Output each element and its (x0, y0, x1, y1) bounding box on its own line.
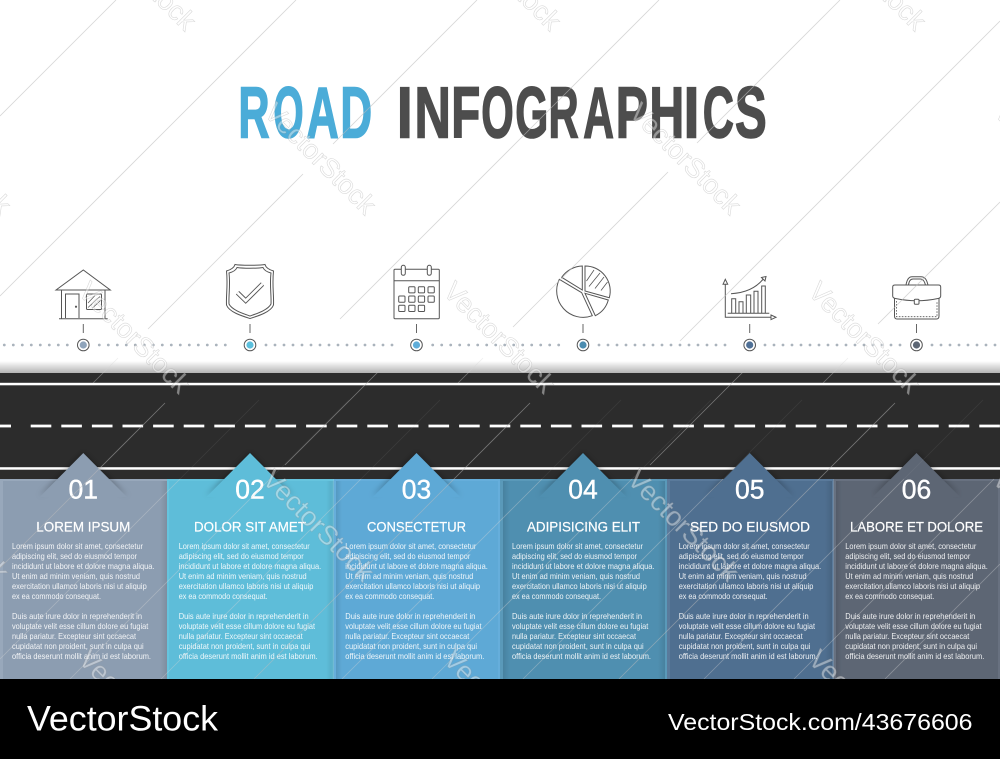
body text: nulla pariatur. Excepteur sint occaecat (179, 631, 303, 641)
timeline markers (78, 324, 922, 351)
body text (12, 541, 154, 661)
panel: 05 sed do eiusmod (667, 452, 834, 679)
number: 02 (235, 474, 265, 504)
watermark: repeated VectorStock text: VectorStock (622, 464, 745, 587)
number: 01 (69, 474, 98, 504)
number: 05 (735, 474, 764, 504)
icon: growth chart (723, 276, 776, 320)
marker 02 (244, 339, 256, 351)
body text: incididunt ut labore et dolore magna aliqua. (679, 561, 821, 571)
watermark: repeated VectorStock text: VectorStock (257, 464, 380, 587)
body text: Lorem ipsum dolor sit amet, consectetur (845, 541, 977, 551)
title: I (397, 72, 413, 153)
title: O (481, 74, 514, 153)
title (238, 72, 767, 154)
body text: nulla pariatur. Excepteur sint occaecat (679, 631, 803, 641)
body text: cupidatat non proident, sunt in culpa qui (12, 641, 144, 651)
body text (345, 541, 488, 661)
body text: exercitation ullamco laboris nisi ut aliquip (179, 581, 314, 591)
number: 06 (902, 474, 931, 504)
body text: officia deserunt mollit anim id est laborum. (845, 651, 984, 661)
body text: nulla pariatur. Excepteur sint occaecat (345, 631, 470, 641)
body text: officia deserunt mollit anim id est laborum. (512, 651, 651, 661)
body text: Lorem ipsum dolor sit amet, consectetur (345, 541, 477, 551)
title: S (735, 73, 767, 153)
body text: adipiscing elit, sed do eiusmod tempor (679, 551, 804, 561)
heading: CONSECTETUR (367, 520, 466, 534)
body text: Duis aute irure dolor in reprehenderit in (179, 611, 309, 621)
body text: ex ea commodo consequat. (679, 591, 768, 601)
body text: officia deserunt mollit anim id est laborum. (679, 651, 818, 661)
body text: voluptate velit esse cillum dolore eu fugiat (512, 621, 649, 631)
body text: incididunt ut labore et dolore magna aliqua. (345, 561, 488, 571)
body text: cupidatat non proident, sunt in culpa qui (345, 641, 477, 651)
body text: Duis aute irure dolor in reprehenderit in (12, 611, 142, 621)
panel: 02 dolor sit amet (167, 452, 334, 679)
road (0, 373, 1000, 479)
body text: incididunt ut labore et dolore magna aliqua. (179, 561, 321, 571)
body text: cupidatat non proident, sunt in culpa qui (179, 641, 311, 651)
title: F (451, 73, 480, 153)
title: G (515, 72, 548, 153)
body text: Lorem ipsum dolor sit amet, consectetur (12, 541, 143, 551)
body text: exercitation ullamco laboris nisi ut aliquip (12, 581, 147, 591)
body text: Ut enim ad minim veniam, quis nostrud (679, 571, 807, 581)
body text: ex ea commodo consequat. (345, 591, 434, 601)
body text: officia deserunt mollit anim id est laborum. (345, 651, 484, 661)
body text: Duis aute irure dolor in reprehenderit in (345, 611, 476, 621)
icon: calendar (394, 265, 439, 319)
marker 04 (577, 339, 589, 351)
footer logo text: VectorStock (27, 700, 219, 738)
body text: Duis aute irure dolor in reprehenderit in (845, 611, 976, 621)
icon: house (56, 270, 110, 319)
marker 06 (911, 339, 922, 351)
body text: exercitation ullamco laboris nisi ut aliquip (845, 581, 980, 591)
heading: LOREM IPSUM (36, 520, 130, 534)
title: R (548, 74, 579, 153)
panel: 01 lorem ipsum (0, 452, 167, 679)
marker 05 (744, 339, 756, 351)
road shadow (0, 361, 1000, 373)
body text: nulla pariatur. Excepteur sint occaecat (12, 631, 137, 641)
marker 03 (411, 339, 422, 351)
number: 03 (402, 474, 431, 504)
body text (512, 541, 654, 661)
panel: 06 labore et dolore (834, 452, 1000, 679)
body text: ex ea commodo consequat. (845, 591, 934, 601)
body text: exercitation ullamco laboris nisi ut aliquip (679, 581, 814, 591)
marker 01 (78, 339, 89, 351)
body text: adipiscing elit, sed do eiusmod tempor (12, 551, 137, 561)
title: N (414, 74, 451, 154)
body text: Ut enim ad minim veniam, quis nostrud (512, 571, 640, 581)
footer image id: VectorStock.com/43676606 (668, 709, 972, 735)
icon: pie chart (557, 266, 610, 317)
body text: exercitation ullamco laboris nisi ut aliquip (512, 581, 647, 591)
body text: adipiscing elit, sed do eiusmod tempor (179, 551, 304, 561)
watermark: repeated VectorStock text: VectorStock (259, 97, 382, 220)
body text: Ut enim ad minim veniam, quis nostrud (12, 571, 140, 581)
title: R (238, 72, 270, 153)
title: O (273, 74, 304, 154)
body text: officia deserunt mollit anim id est laborum. (12, 651, 151, 661)
heading: ADIPISICING ELIT (527, 520, 640, 534)
body text: officia deserunt mollit anim id est laborum. (179, 651, 318, 661)
body text: ex ea commodo consequat. (179, 591, 268, 601)
body text: ex ea commodo consequat. (512, 591, 601, 601)
body text: voluptate velit esse cillum dolore eu fugiat (845, 621, 982, 631)
body text: Lorem ipsum dolor sit amet, consectetur (512, 541, 643, 551)
body text: adipiscing elit, sed do eiusmod tempor (512, 551, 637, 561)
body text: incididunt ut labore et dolore magna aliqua. (12, 561, 154, 571)
title: A (583, 72, 614, 153)
watermark: repeated VectorStock text: VectorStock (624, 97, 747, 220)
icon: briefcase (893, 277, 941, 319)
number: 04 (568, 474, 598, 504)
heading: SED DO EIUSMOD (690, 520, 810, 534)
title: A (306, 73, 339, 153)
body text: Ut enim ad minim veniam, quis nostrud (845, 571, 974, 581)
body text: cupidatat non proident, sunt in culpa qui (512, 641, 644, 651)
body text: voluptate velit esse cillum dolore eu fugiat (679, 621, 816, 631)
heading: LABORE ET DOLORE (850, 520, 983, 534)
body text (845, 541, 988, 661)
body text: Lorem ipsum dolor sit amet, consectetur (679, 541, 810, 551)
body text (679, 541, 821, 661)
footer band (0, 679, 1000, 759)
icon: shield with check (226, 264, 274, 318)
body text: adipiscing elit, sed do eiusmod tempor (345, 551, 471, 561)
watermark: repeated VectorStock text: VectorStock (803, 276, 926, 399)
body text: Lorem ipsum dolor sit amet, consectetur (179, 541, 310, 551)
watermark: repeated VectorStock text: VectorStock (73, 276, 196, 399)
body text: Duis aute irure dolor in reprehenderit in (679, 611, 809, 621)
body text: adipiscing elit, sed do eiusmod tempor (845, 551, 971, 561)
body text: ex ea commodo consequat. (12, 591, 101, 601)
body text: Ut enim ad minim veniam, quis nostrud (179, 571, 307, 581)
body text: nulla pariatur. Excepteur sint occaecat (512, 631, 637, 641)
body text: cupidatat non proident, sunt in culpa qui (679, 641, 811, 651)
title: P (616, 73, 648, 153)
body text: incididunt ut labore et dolore magna aliqua. (512, 561, 654, 571)
body text (179, 541, 321, 661)
heading: DOLOR SIT AMET (194, 520, 306, 534)
body text: Duis aute irure dolor in reprehenderit in (512, 611, 642, 621)
body text: voluptate velit esse cillum dolore eu fugiat (12, 621, 149, 631)
body text: voluptate velit esse cillum dolore eu fugiat (345, 621, 482, 631)
body text: nulla pariatur. Excepteur sint occaecat (845, 631, 970, 641)
title: D (340, 72, 372, 153)
title: I (684, 72, 700, 153)
body text: exercitation ullamco laboris nisi ut aliquip (345, 581, 480, 591)
body text: incididunt ut labore et dolore magna aliqua. (845, 561, 988, 571)
body text: Ut enim ad minim veniam, quis nostrud (345, 571, 474, 581)
watermark: repeated VectorStock text: VectorStock (438, 276, 561, 399)
title: H (649, 73, 684, 153)
dotted timeline (4, 344, 1000, 346)
title: C (703, 72, 734, 153)
body text: cupidatat non proident, sunt in culpa qui (845, 641, 977, 651)
body text: voluptate velit esse cillum dolore eu fugiat (179, 621, 316, 631)
panel: 03 consectetur (334, 452, 500, 679)
panel: 04 adipisicing elit (500, 452, 667, 679)
